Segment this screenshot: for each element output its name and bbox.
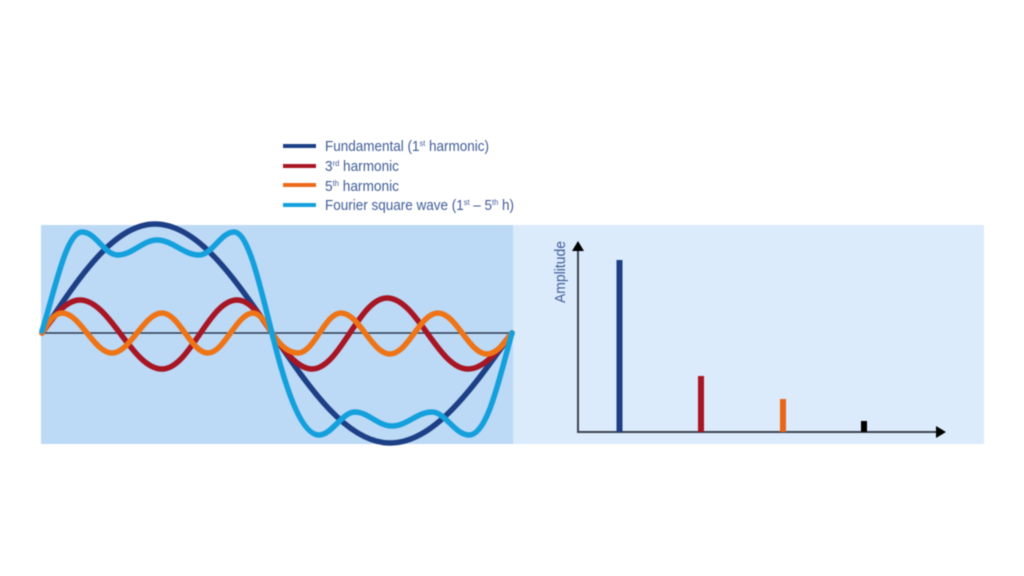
bar: 5th harmonic [780, 399, 786, 432]
legend item: 3rd harmonic: 3 [325, 159, 333, 175]
bar: 3rd harmonic [698, 376, 704, 432]
legend item: fundamental: harmonic) [425, 139, 489, 155]
legend item: Fourier square wave: Fourier square wave (1 [325, 198, 474, 214]
legend item: Fourier square wave: h) [498, 198, 514, 214]
panel: time domain background [41, 225, 513, 444]
legend item: Fourier square wave [283, 198, 514, 214]
5th harmonic wave [42, 313, 512, 354]
y axis arrow [572, 241, 584, 432]
legend item: 3rd harmonic [283, 159, 399, 175]
legend item: 3rd harmonic: rd [333, 159, 339, 168]
x axis arrow [577, 426, 946, 438]
legend item: 5th harmonic: harmonic [339, 179, 399, 195]
legend item: Fourier square wave: st [464, 198, 470, 207]
panel: frequency domain background [513, 225, 984, 444]
legend item: Fourier square wave: – 5 [470, 198, 492, 214]
legend item: fundamental: Fundamental (1 [325, 139, 427, 155]
legend item: 5th harmonic: th [333, 179, 339, 188]
fundamental wave [42, 224, 512, 443]
legend item: 3rd harmonic: harmonic [339, 159, 399, 175]
legend item: 5th harmonic [283, 179, 399, 195]
spectrum chart [553, 241, 946, 438]
bar: fundamental [616, 260, 622, 432]
Fourier square wave [42, 232, 512, 435]
legend item: 5th harmonic: 5 [325, 179, 333, 195]
legend item: Fourier square wave: th [492, 198, 498, 207]
time axis [42, 332, 512, 334]
amplitude axis label: Amplitude [553, 241, 569, 303]
legend item: fundamental [283, 139, 489, 155]
bar: 7th harmonic [861, 421, 867, 432]
legend [283, 139, 514, 214]
wave chart [42, 224, 512, 443]
legend item: fundamental: st [419, 139, 426, 148]
3rd harmonic wave [42, 298, 512, 369]
